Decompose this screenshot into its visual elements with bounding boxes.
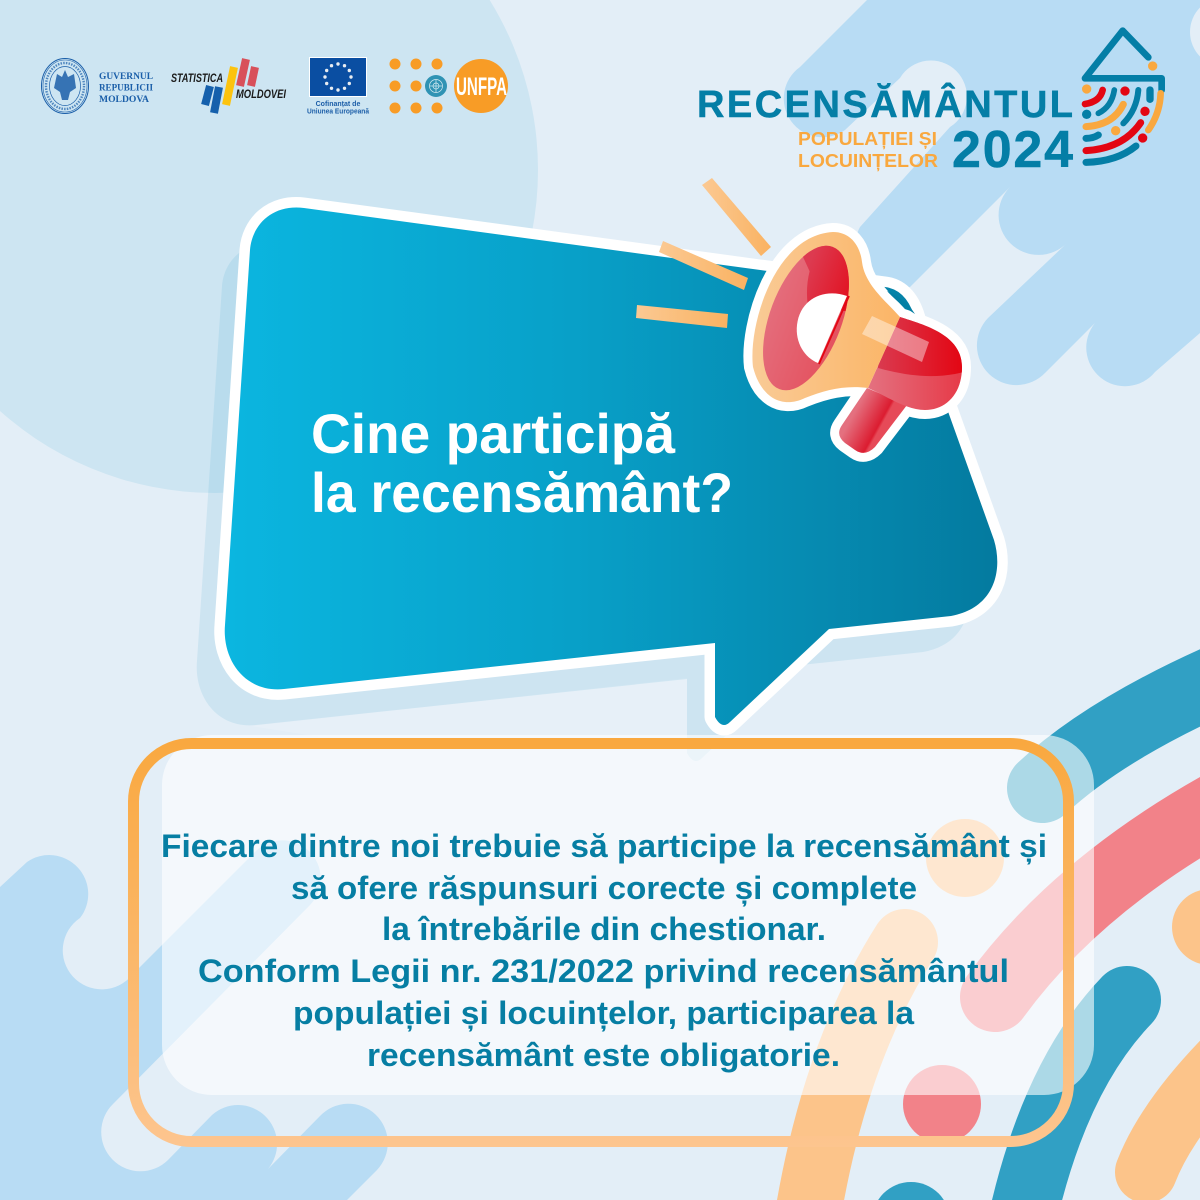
- decorative shape: top right blue bands: [784, 0, 1200, 386]
- logo: UNDP dots and UN emblem: [390, 58, 447, 114]
- decorative circle: top left: [0, 0, 538, 493]
- logo: Guvernul Republicii Moldova: REPUBLICII: [99, 84, 153, 94]
- logo text: census title: RECENSĂMÂNTUL: [697, 82, 1073, 126]
- body text: la întrebările din chestionar.: [382, 911, 826, 947]
- logo: European Union flag: Uniunea Europeană: [307, 108, 369, 116]
- logo text: census title: POPULAȚIEI ȘI: [798, 128, 937, 149]
- logo: UNFPA: UNFPA: [456, 73, 507, 101]
- body text: să ofere răspunsuri corecte și complete: [291, 870, 917, 906]
- heading: Cine participă: [311, 402, 676, 465]
- logo: European Union flag: Cofinanțat de: [316, 101, 360, 108]
- body text: [161, 828, 1047, 1073]
- decorative shape: bottom left blue bands: [0, 840, 388, 1200]
- speech bubble: [225, 208, 997, 725]
- body text: populației și locuințelor, participarea la: [293, 995, 914, 1031]
- body text: Conform Legii nr. 231/2022 privind recensământul: [198, 953, 1009, 989]
- heading: [311, 402, 733, 524]
- body text: recensământ este obligatorie.: [367, 1037, 840, 1073]
- heading: la recensământ?: [311, 461, 733, 524]
- logo: Statistica Moldovei: [171, 59, 287, 113]
- logo: European Union flag: [307, 58, 369, 116]
- logo: Guvernul Republicii Moldova: GUVERNUL: [99, 72, 153, 82]
- bubble shadow: [197, 244, 969, 761]
- orange panel border: [134, 744, 1068, 1142]
- logo: Statistica Moldovei: STATISTICA: [171, 73, 223, 85]
- translucent text panel: [162, 735, 1094, 1095]
- logo: Guvernul Republicii Moldova: [42, 58, 153, 114]
- logo text: census title: 2024: [952, 121, 1073, 179]
- faint light patch under bubble shadow: [251, 678, 687, 737]
- body text: Fiecare dintre noi trebuie să participe la recensământ și: [161, 828, 1047, 864]
- logo: Statistica Moldovei: MOLDOVEI: [236, 89, 287, 101]
- logo: Guvernul Republicii Moldova: MOLDOVA: [99, 95, 149, 105]
- decorative shapes: bottom right arcs and dots: [804, 670, 1200, 1200]
- logo text: census title: [697, 82, 1073, 179]
- icon: megaphone: [746, 232, 962, 453]
- logo text: census title: LOCUINȚELOR: [798, 150, 938, 171]
- icon: census house logo: [1082, 31, 1162, 162]
- rays: [636, 178, 771, 328]
- logo: UNFPA: [454, 59, 508, 113]
